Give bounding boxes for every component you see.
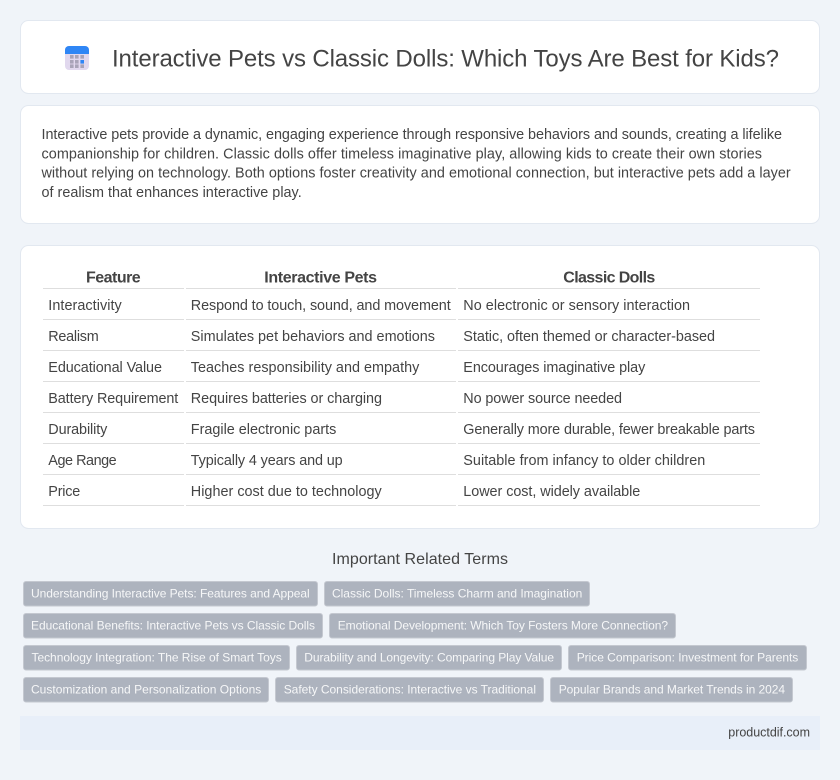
text block: introduction paragraph: without relying on technology. Both options foster creativity and emotional connection, but interactive pets add a layer — [40, 166, 791, 182]
tag: emotional development: Emotional Development: Which Toy Fosters More Connection? — [338, 619, 668, 633]
tag: popular brands: Popular Brands and Market Trends in 2024 — [559, 683, 785, 697]
table row: educational value: Teaches responsibility and empathy — [191, 360, 420, 376]
tag: durability and longevity — [296, 646, 562, 670]
table row: age range — [43, 453, 760, 475]
tag: classic dolls: Classic Dolls: Timeless Charm and Imagination — [332, 587, 582, 601]
heading: related terms: Important Related Terms — [332, 551, 508, 568]
table header: Classic Dolls — [563, 270, 655, 287]
table row: price — [43, 484, 760, 506]
table row: durability: Fragile electronic parts — [191, 422, 336, 438]
table header: Interactive Pets — [264, 270, 377, 287]
table row: educational value: Encourages imaginative play — [463, 360, 646, 376]
table header — [43, 270, 760, 289]
text block: introduction paragraph: companionship for children. Classic dolls offer timeless imaginative play, allowing kids to create their own stories — [42, 146, 762, 162]
table row: battery requirement: Requires batteries or charging — [191, 391, 382, 407]
tag: classic dolls — [324, 582, 590, 606]
table row: educational value — [43, 360, 760, 382]
table row: battery requirement: No power source needed — [463, 391, 622, 407]
text block: introduction paragraph: Interactive pets provide a dynamic, engaging experience through responsive behaviors and sounds, creating a lifelike — [42, 127, 782, 143]
table row: price: Price — [48, 484, 80, 500]
table row: realism: Simulates pet behaviors and emotions — [191, 329, 435, 345]
table row: battery requirement: Battery Requirement — [48, 391, 178, 407]
tag: price comparison: Price Comparison: Investment for Parents — [577, 651, 798, 665]
tag: educational benefits — [24, 614, 322, 638]
table row: battery requirement — [43, 391, 760, 413]
tag: educational benefits: Educational Benefits: Interactive Pets vs Classic Dolls — [31, 619, 315, 633]
text block: introduction paragraph — [40, 127, 791, 201]
tag: customization — [24, 678, 268, 702]
panel: introduction — [20, 106, 820, 224]
icon: calendar — [65, 46, 89, 70]
table row: durability: Durability — [48, 422, 108, 438]
table row: interactivity — [43, 298, 760, 320]
title: Interactive Pets vs Classic Dolls: Which Toys Are Best for Kids? — [112, 46, 779, 73]
footer — [20, 716, 820, 750]
tag: customization: Customization and Personalization Options — [31, 683, 261, 697]
table row: realism — [43, 329, 760, 351]
table row: interactivity: Interactivity — [48, 298, 122, 314]
tag: popular brands — [550, 678, 792, 702]
text block: introduction paragraph: of realism that enhances interactive play. — [42, 185, 302, 201]
panel: header — [20, 20, 820, 94]
tag: technology integration: Technology Integration: The Rise of Smart Toys — [32, 651, 282, 665]
table row: age range: Age Range — [48, 453, 117, 469]
tag: understanding interactive pets: Understanding Interactive Pets: Features and Appeal — [31, 587, 310, 601]
table row: realism: Realism — [48, 329, 99, 345]
table row: price: Lower cost, widely available — [463, 484, 640, 500]
table row: interactivity: No electronic or sensory interaction — [463, 298, 690, 314]
table row: educational value: Educational Value — [48, 360, 162, 376]
tag: price comparison — [568, 646, 806, 670]
tag: technology integration — [24, 646, 290, 670]
related term tags — [24, 582, 806, 702]
table row: interactivity: Respond to touch, sound, and movement — [191, 298, 451, 314]
tag: safety considerations — [276, 678, 544, 702]
table row: age range: Typically 4 years and up — [191, 453, 343, 469]
tag: understanding interactive pets — [24, 582, 318, 606]
table row: durability: Generally more durable, fewer breakable parts — [463, 422, 755, 438]
footer source text: productdif.com — [728, 726, 810, 740]
tag: emotional development — [330, 614, 676, 638]
panel: comparison table — [20, 246, 820, 528]
table row: price: Higher cost due to technology — [191, 484, 382, 500]
tag: safety considerations: Safety Considerations: Interactive vs Traditional — [284, 683, 536, 697]
table row: realism: Static, often themed or character-based — [463, 329, 715, 345]
tag: durability and longevity: Durability and Longevity: Comparing Play Value — [304, 651, 554, 665]
table header: Feature — [86, 270, 141, 287]
table row: age range: Suitable from infancy to older children — [463, 453, 705, 469]
table row: durability — [43, 422, 760, 444]
